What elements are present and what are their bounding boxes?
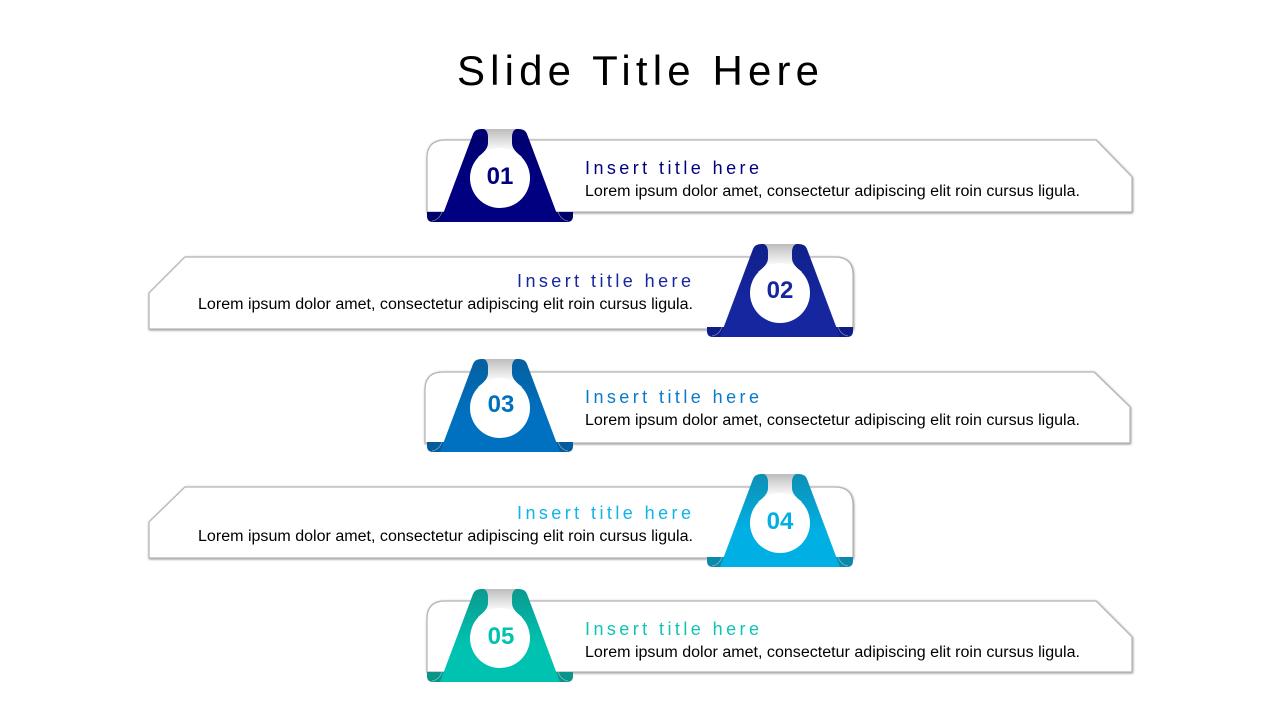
body text 05: Lorem ipsum dolor amet, consectetur adipiscing elit roin cursus ligula. (585, 644, 1080, 661)
panel: item 02 (149, 244, 853, 337)
heading 02: Insert title here (517, 271, 691, 291)
panel: item 03 (425, 359, 1130, 452)
tab icon 04 (707, 474, 853, 567)
card 02 (149, 257, 853, 329)
tab icon 05: 05 (488, 623, 514, 650)
heading 04: Insert title here (517, 503, 691, 523)
tab icon 03 (427, 359, 573, 452)
heading 03: Insert title here (585, 387, 759, 407)
card 05 (427, 601, 1132, 672)
heading 05: Insert title here (585, 619, 759, 639)
tab icon 02 (707, 244, 853, 337)
tab icon 01: 01 (487, 163, 513, 190)
body text 04: Lorem ipsum dolor amet, consectetur adipiscing elit roin cursus ligula. (198, 528, 693, 545)
tab icon 03: 03 (488, 391, 514, 418)
tab icon 02: 02 (767, 277, 793, 304)
card 01 (427, 140, 1132, 212)
tab icon 04: 04 (767, 508, 794, 535)
panel: item 01 (427, 129, 1132, 222)
panel: item 05 (427, 589, 1132, 682)
title: Slide Title Here (457, 47, 819, 94)
tab icon 01 (427, 129, 573, 222)
panel: item 04 (149, 474, 853, 567)
card 04 (149, 487, 853, 558)
heading 01: Insert title here (585, 158, 759, 178)
tab icon 05 (427, 589, 573, 682)
body text 02: Lorem ipsum dolor amet, consectetur adipiscing elit roin cursus ligula. (198, 296, 693, 313)
body text 01: Lorem ipsum dolor amet, consectetur adipiscing elit roin cursus ligula. (585, 183, 1080, 200)
body text 03: Lorem ipsum dolor amet, consectetur adipiscing elit roin cursus ligula. (585, 412, 1080, 429)
card 03 (425, 372, 1130, 443)
